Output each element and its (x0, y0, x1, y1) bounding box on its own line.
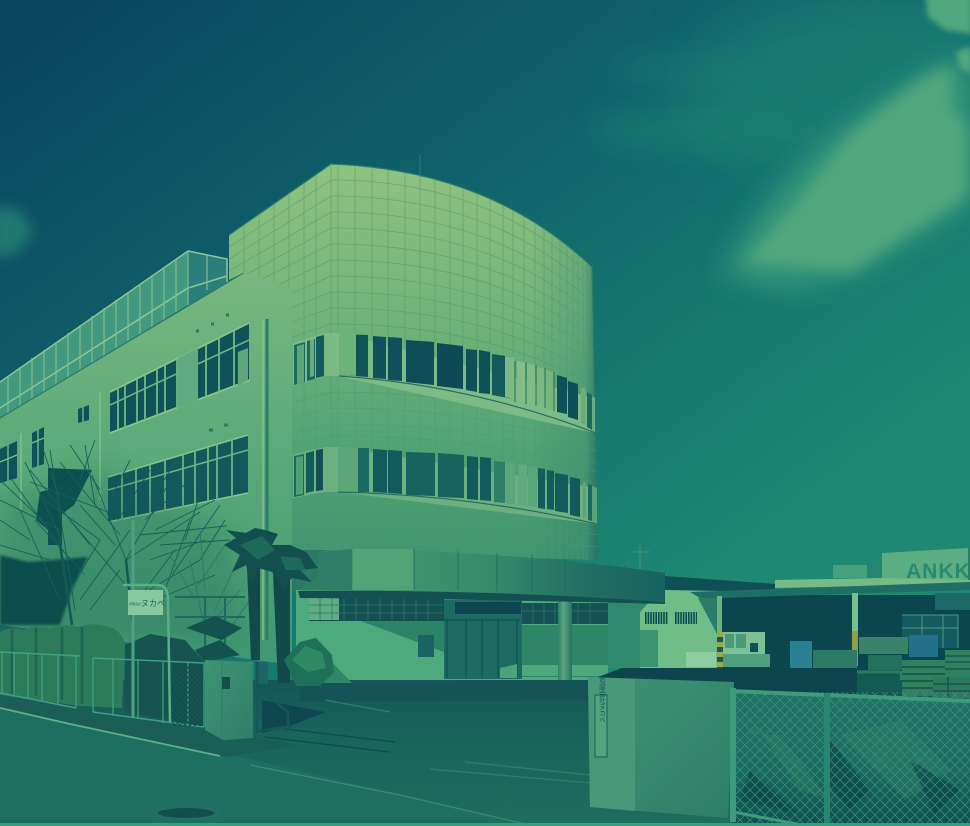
small wing windows (0, 405, 89, 483)
shadow lines (265, 729, 395, 752)
tile grid (229, 160, 598, 560)
antenna (419, 155, 421, 177)
manhole (148, 806, 222, 820)
company sign on poles (123, 520, 170, 722)
gate wall with nameplate: 有限会社ヌカベ (598, 676, 606, 723)
bins (686, 652, 716, 667)
wall vents (645, 612, 697, 624)
gate wall with nameplate (588, 676, 734, 818)
road white line (0, 708, 220, 756)
left street fence (0, 652, 204, 727)
entrance (444, 600, 522, 679)
rooftop equipment (868, 560, 882, 574)
hedge behind fence (0, 624, 204, 727)
lower wing windows (108, 435, 248, 522)
dark parking lot (590, 668, 860, 695)
low roof (665, 576, 775, 592)
tower canopy (298, 549, 665, 604)
company sign on poles: ヌカベ (141, 599, 165, 608)
stacked goods (813, 650, 857, 672)
gatepost (205, 660, 253, 740)
warehouse window (902, 615, 958, 648)
tree haze in front of wing (0, 470, 240, 640)
warehouse wall (607, 543, 775, 668)
notice board (723, 632, 770, 667)
tank on roof (833, 565, 867, 578)
ground floor of tower (292, 550, 608, 684)
shadow on wall (358, 620, 444, 652)
sidewalk (0, 695, 300, 757)
glass block strip (309, 596, 444, 621)
company lettering on roof: ANKK (906, 560, 970, 583)
entrance column (558, 596, 572, 684)
bonsai and railing (175, 597, 245, 650)
penthouse glass (0, 251, 227, 418)
upper wing windows (110, 323, 250, 433)
pallets (857, 650, 970, 698)
warehouse canopy and interior (690, 548, 970, 672)
fire escape (36, 468, 92, 545)
shrub near wall (284, 638, 352, 686)
utility pole (632, 543, 650, 574)
left wing of the building (0, 272, 292, 665)
blue containers (790, 641, 812, 671)
clouds (0, 0, 970, 290)
upper window band (293, 333, 596, 433)
wall fixtures (196, 315, 229, 430)
nameplate (595, 695, 607, 757)
chain-link main gate (730, 688, 970, 826)
right wall (522, 625, 608, 677)
left road (0, 706, 530, 826)
sliding gate, left (255, 662, 325, 733)
forecourt and road (0, 668, 970, 826)
palm trees (224, 528, 318, 683)
tower: curved main block (229, 155, 598, 560)
lower window band (293, 447, 597, 524)
drain pipes (266, 319, 268, 640)
canopy pillars (717, 596, 722, 632)
company sign on poles: 有限会社 (129, 601, 141, 606)
forecourt markings (325, 700, 590, 783)
bare trees (0, 440, 250, 662)
small wall sign (418, 635, 434, 657)
bottom edge strip (0, 823, 970, 826)
